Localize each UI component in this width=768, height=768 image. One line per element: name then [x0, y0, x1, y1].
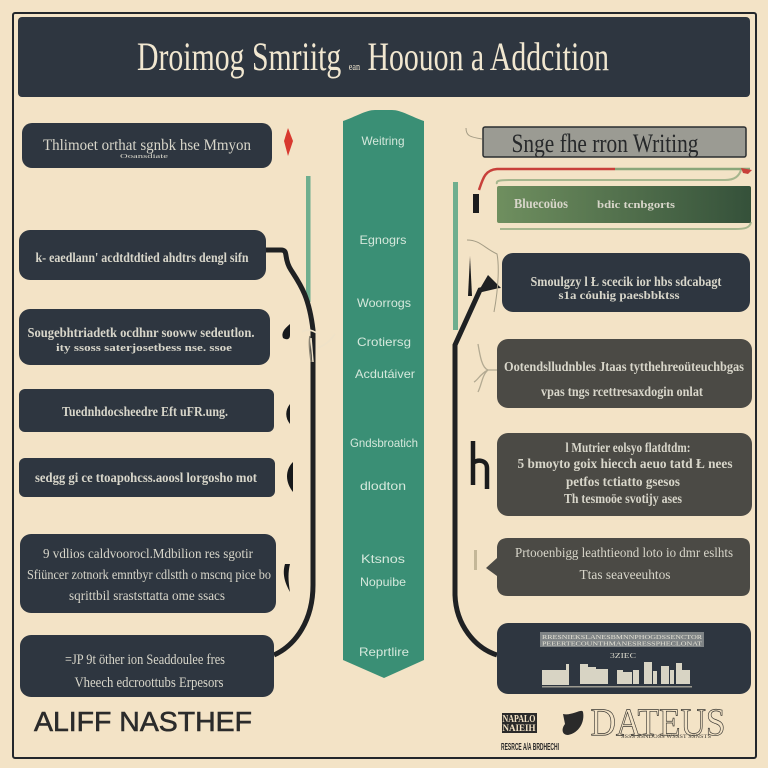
left box 7: =JP 9t öther ion Seaddoulee fres	[65, 652, 225, 668]
connector knot	[302, 330, 335, 362]
left box 2	[19, 230, 266, 280]
left box 7	[20, 635, 274, 697]
central green column: Crotiersg	[357, 335, 411, 349]
left box 7: Vheech edcroottubs Erpesors	[74, 675, 224, 691]
right green box: Bluecoüos	[514, 196, 568, 211]
pointer shadow mark	[474, 550, 477, 570]
right green box: bdic tcnbgorts	[597, 199, 676, 211]
author name: ALIFF NASTHEF	[34, 706, 252, 737]
logo wordmark: DATEUS	[590, 701, 726, 744]
left box 5	[19, 458, 275, 497]
h glyph icon	[473, 441, 487, 489]
left tick 3	[282, 324, 290, 339]
left box 6: 9 vdlios caldvoorocl.Mdbilion res sgotir	[43, 547, 253, 562]
right box 3	[502, 253, 750, 312]
red marker	[284, 128, 293, 156]
left green rail	[306, 176, 310, 302]
right box 7 with skyline: 3ZIEC	[610, 651, 636, 660]
right box 5	[497, 433, 752, 516]
right box 7 with skyline: RRESNIEKSLANESBMNNPHOGDSSENCTOR	[542, 634, 703, 641]
wire end red	[741, 168, 752, 174]
left box 6	[20, 534, 276, 613]
central green column	[343, 110, 424, 678]
branch mark	[474, 344, 497, 392]
central green column: Weitring	[362, 134, 404, 148]
title banner: Droimog Smriitg ean Hoouon a Addcition	[137, 34, 609, 79]
logo block left: NAPALO	[502, 714, 536, 725]
left box 6: sqrittbil sraststtatta ome ssacs	[69, 589, 225, 604]
skyline	[542, 662, 692, 688]
right box 6 with pointer	[486, 538, 750, 596]
right grey heading box: Snge fhe rron Writing	[512, 129, 698, 158]
left connector curve	[264, 250, 313, 655]
right box 6 with pointer: Ttas seaveeuhtos	[580, 568, 670, 583]
left box 3	[19, 309, 270, 365]
central green column: Acdutáiver	[355, 367, 415, 381]
right box 7 with skyline: PEEERTECOUNTHMANESRESSPHECLONAT	[542, 640, 702, 648]
right box 5: Th tesmoöe svotijy ases	[564, 491, 682, 506]
left box 1	[22, 123, 272, 168]
central green column: Reprtlire	[359, 645, 409, 659]
left tick 4	[286, 404, 290, 424]
right box 4	[497, 339, 752, 408]
text: RESRCE A/A BRDHECHI	[501, 742, 559, 753]
central green column: dlodton	[360, 479, 406, 493]
central green column: Nopuibe	[360, 575, 406, 589]
right box 4: vpas tngs rcettresaxdogin onlat	[541, 384, 703, 399]
right tick	[468, 256, 472, 296]
right box 4: Ootendslludnbles Jtaas tytthehreoüteuchbgas	[504, 359, 744, 374]
central green column: Ktsnos	[361, 552, 405, 566]
left box 5: sedgg gi ce ttoapohcss.aoosl lorgosho mot	[35, 470, 257, 485]
right box 3: Smoulgzy l Ł scecik ior hbs sdcabagt	[530, 274, 722, 289]
right box 7 with skyline	[497, 623, 751, 694]
left tick 5	[287, 462, 293, 492]
right green rail	[453, 182, 458, 330]
right box 5: petfos tctiatto gsesos	[566, 474, 680, 489]
left box 3: ity ssoss saterjosetbess nse. ssoe	[56, 342, 232, 354]
left box 6: Sfiüncer zotnork emntbyr cdlstth o mscnq pice bo	[27, 568, 271, 583]
right box 6 with pointer: Prtooenbigg leathtieond loto io dmr eslhts	[515, 546, 733, 561]
central green column: Woorrogs	[357, 296, 411, 310]
left box 2: k- eaedlann' acdtdtdtied ahdtrs dengl sifn	[36, 250, 249, 265]
central green column: Egnogrs	[360, 233, 406, 247]
left tick 6	[284, 564, 290, 592]
logo wordmark: SSSS SSNDOSS WSSST SSNSTS	[621, 735, 711, 740]
wire clip	[473, 194, 479, 213]
logo bird icon	[563, 711, 583, 735]
central green column: Gndsbroatich	[350, 436, 418, 450]
thin wire to box	[467, 240, 498, 312]
left box 1: Thlimoet orthat sgnbk hse Mmyon	[43, 137, 251, 154]
small wire stub	[466, 128, 482, 139]
arrow head	[478, 275, 501, 292]
right box 5: l Mutrier eolsyo flatdtdm:	[566, 440, 690, 455]
right green box	[497, 186, 751, 223]
left box 1: Ooansdiate	[120, 154, 169, 160]
right box 3: s1a cóuhig paesbbktss	[558, 290, 680, 302]
coloured wires	[479, 169, 751, 229]
logo block left	[501, 713, 559, 753]
title banner	[18, 17, 750, 97]
logo block left: NAIEIH	[502, 723, 536, 733]
right box 5: 5 bmoyto goix hiecch aeuo tatd Ł nees	[518, 456, 732, 471]
right connector arrow	[455, 286, 497, 655]
left box 4: Tuednhdocsheedre Eft uFR.ung.	[62, 404, 228, 419]
left box 3: Sougebhtriadetk ocdhnr sooww sedeutlon.	[28, 325, 254, 340]
left box 4	[19, 389, 274, 432]
